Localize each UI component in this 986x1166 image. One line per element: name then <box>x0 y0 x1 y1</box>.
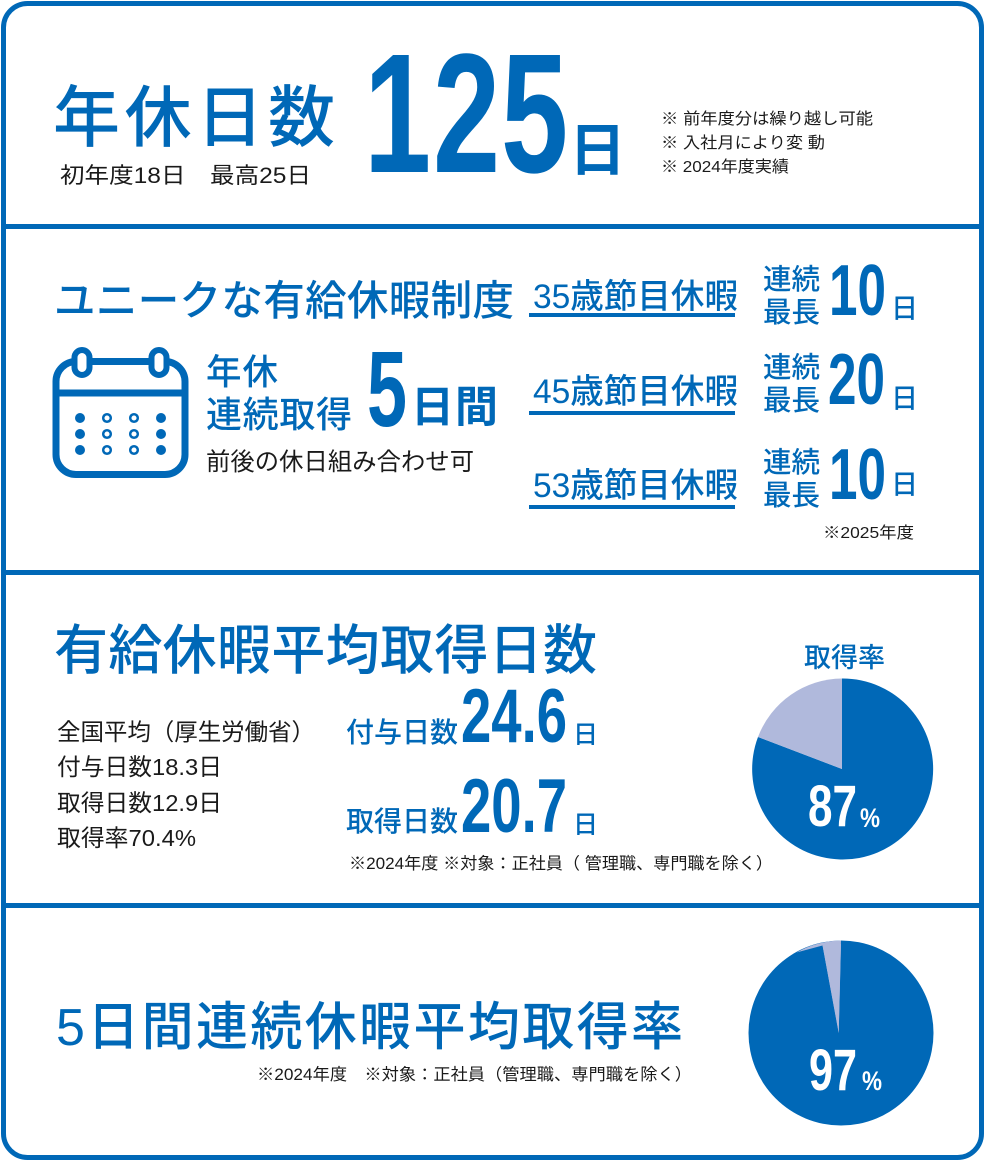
row: age 53 milestone leave: 最長 <box>763 480 820 512</box>
heading: five-day leave average rate: 5日間連続休暇平均取得率 <box>56 999 683 1057</box>
pie chart: 87 percent <box>752 678 933 859</box>
big number: 125 days <box>364 20 626 209</box>
note: fiscal 2024 and scope: ※2024年度 ※対象：正社員（管理職、専門職を除く） <box>257 1065 692 1084</box>
pie chart: 97 percent <box>748 940 934 1126</box>
notes: annual leave conditions: ※ 前年度分は繰り越し可能 <box>661 110 873 128</box>
stat: days granted: 日 <box>573 721 598 749</box>
text: consecutive leave 5 days: 5 <box>367 328 407 449</box>
row: age 35 milestone leave: 連続 <box>763 264 820 296</box>
text: consecutive leave 5 days: 日間 <box>411 384 498 432</box>
text: first year and maximum days: 初年度18日 最高25日 <box>60 163 311 188</box>
row: age 53 milestone leave: 連続 <box>763 447 820 479</box>
icon: calendar <box>56 350 185 474</box>
text: national average: 付与日数18.3日 <box>57 754 222 780</box>
pie chart: 87 percent: 87 <box>808 774 857 839</box>
row: age 53 milestone leave: 10 <box>829 435 886 515</box>
note: fiscal 2024 and scope: ※2024年度 ※対象：正社員（ 管理職、専門職を除く） <box>349 854 773 873</box>
stat: days taken <box>346 764 598 849</box>
heading: average paid leave days: 有給休暇平均取得日数 <box>54 621 597 681</box>
text: consecutive leave 5 days: 連続取得 <box>206 394 352 435</box>
big number: 125 days: 5 <box>501 20 568 209</box>
text: national average: 取得日数12.9日 <box>57 790 222 816</box>
big number: 125 days: 日 <box>569 119 626 183</box>
row: age 45 milestone leave: 日 <box>891 384 918 414</box>
row: age 45 milestone leave: 最長 <box>763 385 820 417</box>
panel: average paid leave taken <box>54 621 933 873</box>
label: acquisition rate: 取得率 <box>804 643 885 673</box>
row: age 53 milestone leave: 日 <box>891 470 918 500</box>
text: national average: 全国平均（厚生労働省） <box>57 719 315 745</box>
text: consecutive leave 5 days <box>206 328 498 449</box>
row: age 35 milestone leave <box>529 251 918 331</box>
text: national average <box>57 719 315 851</box>
row: age 35 milestone leave: 10 <box>829 251 886 331</box>
pie chart: 87 percent: % <box>860 803 880 833</box>
stat: days granted <box>346 674 598 759</box>
big number: 125 days: 2 <box>433 20 500 209</box>
stat: days granted: 24.6 <box>461 674 567 759</box>
notes: annual leave conditions <box>661 110 873 176</box>
notes: annual leave conditions: ※ 2024年度実績 <box>661 158 789 176</box>
row: age 35 milestone leave: 35歳節目休暇 <box>533 278 738 316</box>
stat: days taken: 20.7 <box>461 764 567 849</box>
panel: unique paid leave system <box>54 251 918 542</box>
note: fiscal 2025: ※2025年度 <box>823 524 914 542</box>
stat: days granted: 付与日数 <box>346 717 458 748</box>
stat: days taken: 日 <box>573 811 598 839</box>
row: age 53 milestone leave: 53歳節目休暇 <box>533 467 738 505</box>
heading: annual leave days: 年休日数 <box>53 81 335 156</box>
notes: annual leave conditions: ※ 入社月により変 動 <box>661 134 825 152</box>
row: age 45 milestone leave: 20 <box>828 340 885 420</box>
heading: unique paid leave system: ユニークな有給休暇制度 <box>54 277 514 324</box>
row: age 45 milestone leave <box>529 340 918 420</box>
pie chart: 97 percent: 97 <box>809 1038 857 1103</box>
row: age 35 milestone leave: 日 <box>891 294 918 324</box>
pie chart: 97 percent: % <box>862 1066 882 1096</box>
panel: annual leave days <box>53 20 873 209</box>
row: age 45 milestone leave: 45歳節目休暇 <box>533 373 738 411</box>
row: age 53 milestone leave <box>529 435 918 515</box>
text: can combine with holidays: 前後の休日組み合わせ可 <box>206 449 474 476</box>
text: consecutive leave 5 days: 年休 <box>206 352 278 392</box>
stat: days taken: 取得日数 <box>346 806 458 837</box>
panel: five-day consecutive leave rate <box>56 940 934 1126</box>
text: national average: 取得率70.4% <box>57 825 196 851</box>
row: age 35 milestone leave: 最長 <box>763 297 820 329</box>
big number: 125 days: 1 <box>364 20 431 209</box>
row: age 45 milestone leave: 連続 <box>763 352 820 384</box>
